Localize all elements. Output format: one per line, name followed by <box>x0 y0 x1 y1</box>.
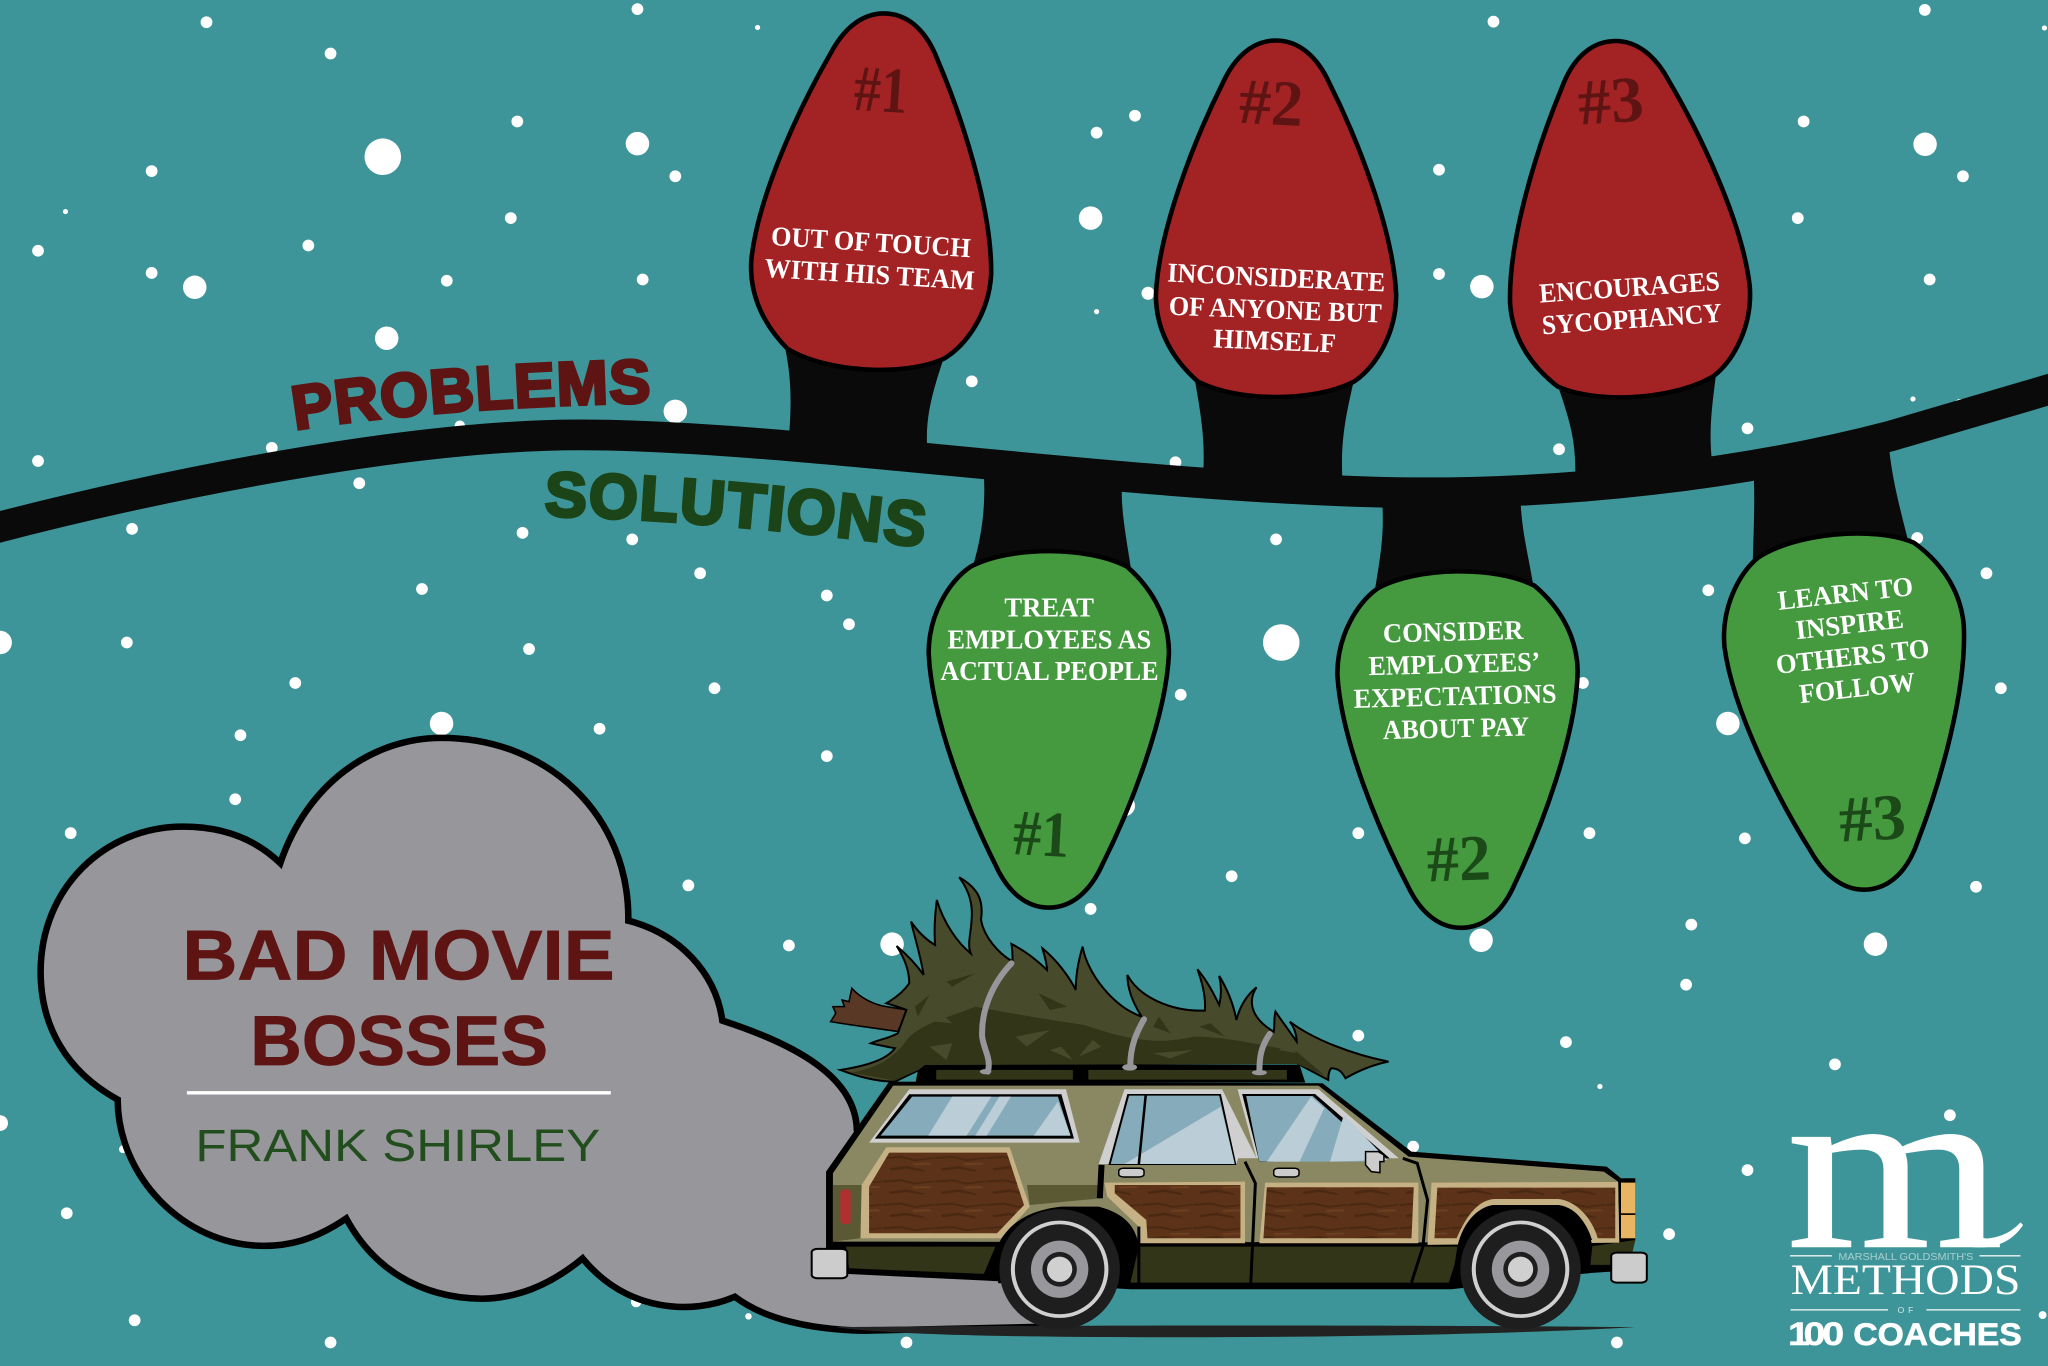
dark body band <box>833 1185 1102 1242</box>
solution bulb 2: CONSIDER <box>1383 615 1525 649</box>
tail light <box>840 1189 851 1224</box>
solution bulb 3: FOLLOW <box>1798 667 1917 709</box>
solution bulb 1: EMPLOYEES AS <box>947 624 1151 654</box>
solution bulb 2: EMPLOYEES’ <box>1368 647 1541 681</box>
front wheel arch <box>1452 1202 1595 1283</box>
problem bulb 2: OF ANYONE BUT <box>1168 291 1382 329</box>
logo: methods of 100 coaches: m <box>1787 1036 2003 1299</box>
problem bulb 3 <box>1492 33 1757 481</box>
problem bulb 3: #3 <box>1576 63 1646 140</box>
front window <box>1238 1089 1399 1162</box>
logo: methods of 100 coaches: COACHES <box>1853 1317 2022 1352</box>
headlights <box>1621 1183 1635 1238</box>
middle window <box>1099 1089 1257 1165</box>
rear wood panel <box>860 1147 1030 1238</box>
problem bulb 3: ENCOURAGES <box>1538 266 1721 309</box>
bumpers <box>812 1249 1647 1283</box>
title block: BOSSES <box>250 1001 548 1080</box>
front wheel <box>1460 1209 1581 1329</box>
solution bulb 2: EXPECTATIONS <box>1353 679 1557 714</box>
exhaust smoke cloud <box>41 738 1041 1331</box>
title block: FRANK SHIRLEY <box>195 1120 600 1171</box>
logo: methods of 100 coaches: 100 <box>1788 1315 1844 1352</box>
tie-down ropes <box>980 963 1270 1075</box>
solution bulb 1: TREAT <box>1004 592 1094 622</box>
rear window <box>869 1089 1080 1143</box>
problem bulb 2: #2 <box>1237 66 1305 141</box>
string of lights wire <box>0 385 2048 530</box>
problem bulb 1: OUT OF TOUCH <box>770 221 972 263</box>
title block: BAD MOVIE <box>182 915 615 994</box>
problem bulb 2: INCONSIDERATE <box>1167 258 1386 297</box>
problem bulb 1: #1 <box>852 53 910 128</box>
side mirror <box>1366 1152 1384 1173</box>
car body paint <box>833 1086 1619 1243</box>
rear door wood panel <box>1104 1182 1245 1243</box>
tree trunk <box>831 988 908 1032</box>
fender wood panel <box>1428 1182 1619 1245</box>
lower sills <box>846 1240 1635 1283</box>
solution bulb 3: INSPIRE <box>1794 604 1905 645</box>
problem bulb 1 <box>745 6 1007 451</box>
solution bulb 3: LEARN TO <box>1776 571 1914 616</box>
door lines <box>1100 1158 1428 1283</box>
station wagon with christmas tree <box>812 877 1647 1337</box>
problem bulb 3: SYCOPHANCY <box>1541 298 1723 340</box>
heading: problems: PROBLEMS <box>291 358 650 431</box>
door handles <box>1119 1168 1299 1177</box>
rear wheel <box>999 1209 1120 1329</box>
christmas tree <box>840 877 1389 1082</box>
solution bulb 3 <box>1715 441 1988 901</box>
solution bulb 2: #2 <box>1426 822 1492 896</box>
logo: methods of 100 coaches: OF <box>1898 1305 1913 1315</box>
logo: methods of 100 coaches <box>1787 1036 2023 1352</box>
title block <box>182 915 615 1171</box>
car body outline <box>826 1082 1635 1289</box>
solution bulb 1 <box>929 470 1169 908</box>
heading: solutions: SOLUTIONS <box>544 470 926 547</box>
logo: methods of 100 coaches: MARSHALL GOLDSMITH'S <box>1838 1252 1974 1263</box>
solution bulb 1: ACTUAL PEOPLE <box>940 656 1159 686</box>
logo: methods of 100 coaches: METHODS <box>1791 1256 2020 1304</box>
problem bulb 2 <box>1156 40 1396 483</box>
solution bulb 3: OTHERS TO <box>1774 633 1931 680</box>
ground shadow <box>835 1326 1635 1337</box>
rear wheel arch <box>997 1207 1139 1283</box>
solution bulb 3: #3 <box>1837 781 1908 857</box>
problem bulb 2: HIMSELF <box>1213 323 1337 359</box>
problem bulb 1: WITH HIS TEAM <box>764 253 976 296</box>
roof rack <box>916 1065 1305 1083</box>
solution bulb 2: ABOUT PAY <box>1383 711 1530 745</box>
solution bulb 2 <box>1336 496 1582 930</box>
solution bulb 1: #1 <box>1011 797 1071 872</box>
front door wood panel <box>1259 1183 1418 1243</box>
